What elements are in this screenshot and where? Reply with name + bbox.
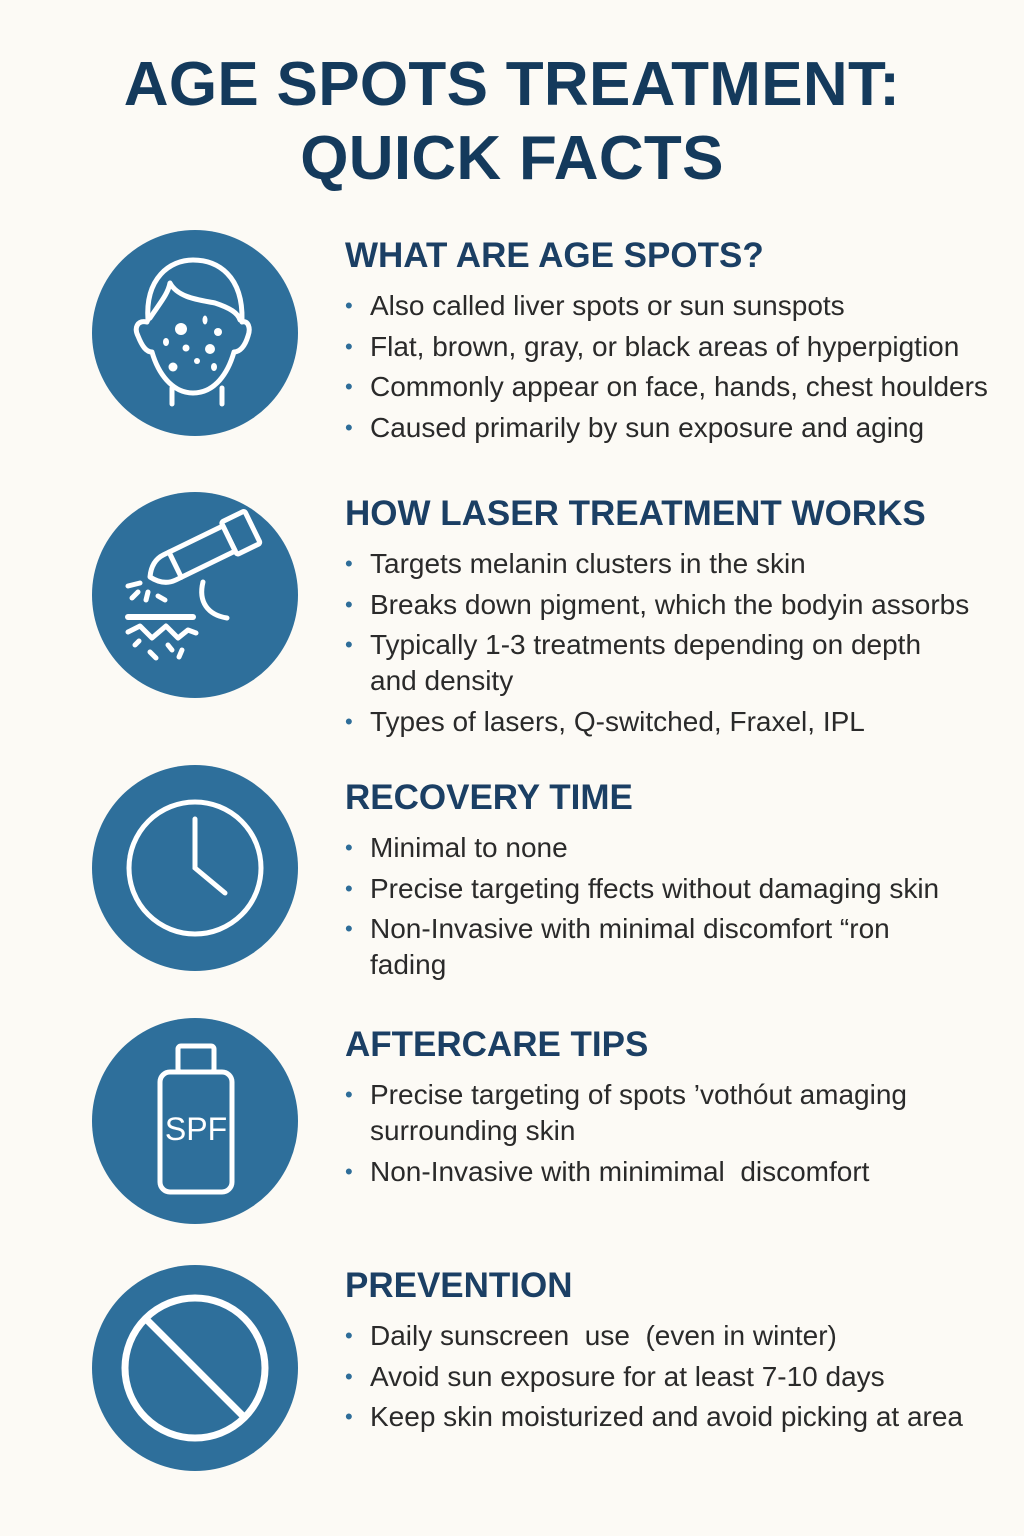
section: recovery time: fading <box>370 949 446 980</box>
section: aftercare: AFTERCARE TIPS <box>345 1025 648 1064</box>
title: QUICK FACTS <box>300 124 724 193</box>
icon: laser device <box>92 492 298 698</box>
icon: SPF bottle: SPF <box>165 1111 227 1147</box>
section: recovery time: Non-Invasive with minimal discomfort “ron <box>370 913 890 944</box>
section: what are age spots: Commonly appear on face, hands, chest houlders <box>370 371 988 402</box>
section: how laser works: Targets melanin clusters in the skin <box>370 548 806 579</box>
section: recovery time: Precise targeting ffects without damaging skin <box>370 872 939 904</box>
section: recovery time: Minimal to none <box>370 832 568 863</box>
icon: clock <box>92 765 298 971</box>
section: how laser works: and density <box>370 665 513 696</box>
section: how laser works: Breaks down pigment, which the bodyin assorbs <box>370 588 969 620</box>
section: aftercare: Non-Invasive with minimimal discomfort <box>370 1156 869 1186</box>
section: how laser works <box>345 494 969 737</box>
section: prevention: Daily sunscreen use (even in winter) <box>370 1320 837 1351</box>
section: how laser works: HOW LASER TREATMENT WORKS <box>345 494 926 533</box>
section: prevention: Avoid sun exposure for at least 7-10 days <box>370 1360 885 1392</box>
section: what are age spots: Also called liver spots or sun sunspots <box>370 290 845 321</box>
section: how laser works: Typically 1-3 treatments depending on depth <box>370 629 921 660</box>
section: recovery time <box>345 778 939 980</box>
icon: prohibition sign <box>92 1265 298 1471</box>
section: aftercare: Precise targeting of spots ’vothóut amaging <box>370 1079 907 1110</box>
section: prevention: Keep skin moisturized and avoid picking at area <box>370 1401 963 1432</box>
icon: SPF bottle <box>92 1018 298 1224</box>
icon: face with spots <box>92 230 298 436</box>
section: prevention: PREVENTION <box>345 1266 573 1305</box>
section: what are age spots: Caused primarily by sun exposure and aging <box>370 412 924 442</box>
section: what are age spots: Flat, brown, gray, or black areas of hyperpigtion <box>370 330 959 362</box>
section: what are age spots <box>345 236 988 443</box>
section: prevention <box>345 1266 963 1432</box>
title: AGE SPOTS TREATMENT: <box>124 50 900 119</box>
section: how laser works: Types of lasers, Q-switched, Fraxel, IPL <box>370 706 865 736</box>
section: what are age spots: WHAT ARE AGE SPOTS? <box>345 236 764 275</box>
section: aftercare <box>345 1025 907 1186</box>
section: recovery time: RECOVERY TIME <box>345 778 633 817</box>
title <box>124 50 900 193</box>
section: aftercare: surrounding skin <box>370 1115 575 1146</box>
